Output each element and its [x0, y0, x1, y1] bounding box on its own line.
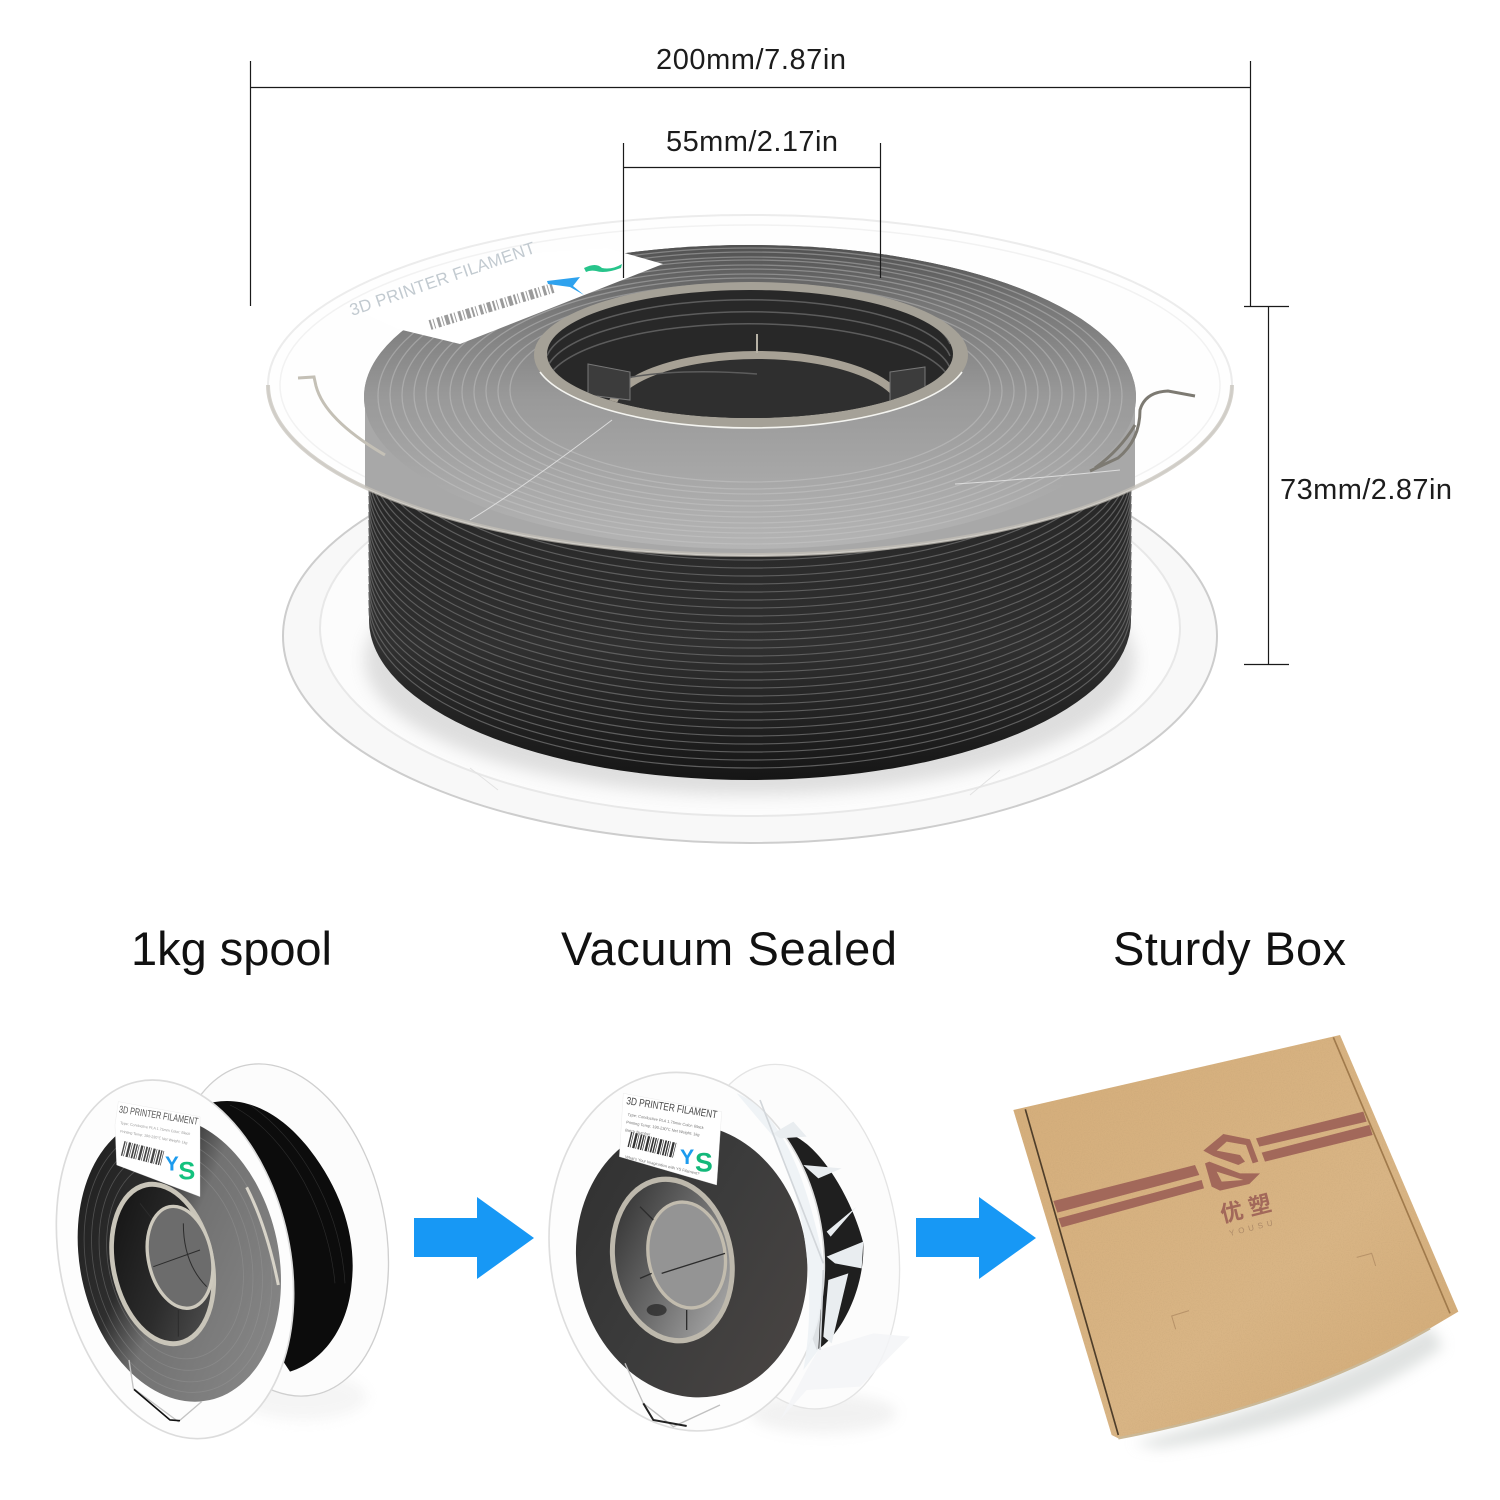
bottom flange: [283, 429, 1217, 843]
corner marks: [1172, 1253, 1376, 1329]
printed stripes: [1053, 1112, 1373, 1227]
small spool photo: 1kg spool: [25, 1044, 418, 1461]
back flange: [142, 1044, 418, 1416]
label: [619, 1093, 722, 1185]
barcode: [430, 288, 553, 325]
dimension: 200mm width: 200mm/7.87in: [656, 44, 846, 76]
heading: Sturdy Box: Sturdy Box: [1113, 922, 1346, 975]
box shadow: [1133, 1327, 1443, 1448]
barcode: [629, 1139, 676, 1151]
arrow 2: [916, 1197, 1036, 1279]
shadow: [240, 1373, 367, 1420]
label: Printing Temp: 190-230℃ Net Weight: 1kg: [626, 1119, 700, 1137]
label title: 3D PRINTER FILAMENT: [347, 238, 538, 320]
YS logo: [680, 1145, 713, 1177]
box body: [1013, 1035, 1458, 1438]
dimension: 55mm hole: 55mm/2.17in: [666, 126, 838, 158]
flange cut slot right with wire: [1090, 391, 1195, 471]
sturdy box photo: [1013, 1035, 1458, 1448]
wire clip: [129, 1360, 202, 1422]
YS logo: S: [695, 1147, 713, 1177]
label: Printing Temp: 190-230℃ Net Weight: 1kg: [120, 1129, 188, 1145]
YS logo: Y: [680, 1145, 694, 1169]
dimension: 55mm hole: [623, 126, 880, 278]
flange cut slot left: [298, 377, 385, 455]
label: What's Your Imagination with YS Filament?: [625, 1154, 701, 1176]
label logo YS: [547, 264, 622, 295]
YS logo: [165, 1153, 195, 1185]
filament face: [52, 1098, 306, 1421]
filament face: [555, 1105, 829, 1416]
small spool photo: vacuum sealed: [526, 1048, 925, 1449]
shadow: [750, 1393, 897, 1433]
main spool photo: [268, 215, 1232, 843]
dimension: 200mm width: [250, 44, 1250, 306]
top transparent flange: [268, 215, 1232, 555]
label: Type: Conductive PLA 1.75mm Color: Black: [120, 1121, 191, 1136]
flange slot: [247, 1187, 278, 1285]
spool hole: [597, 1167, 748, 1353]
heading: 1kg spool: 1kg spool: [131, 922, 332, 975]
front flange: [526, 1054, 847, 1449]
cardboard texture: [1013, 1035, 1458, 1438]
back flange: [665, 1048, 925, 1426]
label: 3D PRINTER FILAMENT: [118, 1104, 199, 1128]
front flange: [25, 1058, 325, 1461]
label: 3D PRINTER FILAMENT: [626, 1095, 718, 1121]
YOUSU logo mark: [1203, 1134, 1260, 1191]
box bottom edge: [1118, 1328, 1430, 1438]
spool shadow: [365, 525, 1135, 795]
dimension: 73mm height: 73mm/2.87in: [1280, 474, 1452, 506]
spool hole: [95, 1172, 231, 1356]
spool hole: [534, 282, 968, 429]
plastic wrap folds: [737, 1093, 910, 1420]
YS logo: Y: [165, 1153, 179, 1176]
black filament side: [203, 1101, 353, 1372]
arrow 1: [414, 1197, 534, 1279]
product label on flange: [345, 238, 663, 344]
barcode: [123, 1148, 163, 1158]
brand text: 优 塑: [1218, 1190, 1274, 1228]
left flap fold: [1025, 1109, 1118, 1435]
label: Batch Number: [625, 1127, 651, 1137]
brand latin text: YOUSU: [1228, 1217, 1277, 1238]
right flap fold: [1333, 1037, 1450, 1313]
heading: Vacuum Sealed: Vacuum Sealed: [561, 922, 897, 975]
gray filament seen through flange: [364, 245, 1136, 555]
filament side in bag: [773, 1132, 863, 1350]
wire clip: [625, 1363, 720, 1427]
label: Type: Conductive PLA 1.75mm Color: Black: [627, 1112, 704, 1130]
dimension: 73mm height: [1244, 306, 1452, 664]
label: [115, 1102, 200, 1197]
flange rim highlight: [268, 385, 1232, 555]
YS logo: S: [178, 1157, 195, 1185]
wound black filament body: [369, 400, 1131, 780]
